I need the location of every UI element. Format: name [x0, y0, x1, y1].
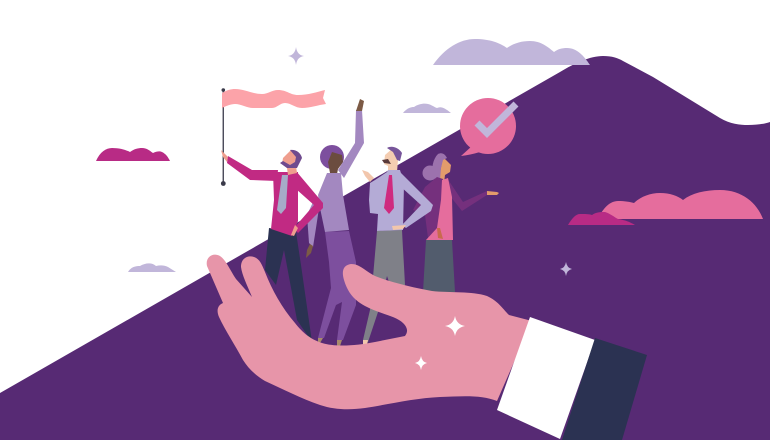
- raised arm: [227, 156, 278, 181]
- sparkle: right: [560, 262, 572, 276]
- head: [439, 157, 451, 183]
- raised arm: [338, 110, 364, 178]
- feet: [318, 338, 342, 346]
- neck and head: [384, 148, 398, 172]
- hand: [487, 191, 499, 195]
- speech bubble with check: [460, 98, 516, 156]
- lowered arm: [307, 202, 319, 247]
- skirt: [423, 240, 455, 292]
- cuff: [497, 317, 595, 439]
- flag pole: [223, 90, 224, 184]
- cloud: left magenta: [96, 148, 170, 161]
- hand: [207, 255, 532, 409]
- torso: [271, 172, 298, 236]
- person 2: [306, 99, 364, 346]
- flag: [221, 88, 326, 186]
- hair and beard: [280, 150, 302, 168]
- sparkle: small on hand: [415, 356, 427, 370]
- foot: [363, 340, 368, 345]
- person 1: [221, 150, 323, 342]
- neck and face: [282, 150, 300, 175]
- hair: [432, 153, 447, 180]
- lowered hand: [306, 244, 313, 258]
- sparkle: top: [288, 47, 304, 65]
- person 4: [413, 153, 499, 292]
- raised hand: [221, 150, 228, 162]
- cloud: right magenta: [568, 212, 635, 225]
- tie: [277, 175, 288, 214]
- hair: [387, 147, 402, 161]
- jacket: [413, 177, 444, 238]
- torso: [318, 173, 349, 232]
- trousers: [318, 231, 356, 340]
- torso and left arm: [369, 170, 404, 231]
- cloud: lower lilac: [128, 263, 176, 272]
- right arm: [398, 170, 433, 228]
- arm on hip: [294, 171, 323, 233]
- right hand: [392, 225, 406, 230]
- moustache: [382, 159, 391, 164]
- arm: [447, 178, 487, 211]
- flag cloth: [222, 89, 326, 108]
- blouse: [426, 178, 453, 240]
- trousers: [363, 230, 405, 342]
- cloud: top lilac: [433, 39, 590, 65]
- cloud: right pink: [598, 190, 763, 219]
- hair: [320, 145, 344, 169]
- raised hand: [356, 99, 364, 111]
- hand in pocket: [437, 228, 443, 239]
- face: [328, 152, 343, 174]
- sleeve: [562, 338, 647, 440]
- tie: [384, 175, 394, 214]
- left hand: [362, 170, 374, 182]
- trousers: [265, 228, 312, 342]
- hair bun: [422, 166, 438, 180]
- hand on hip: [291, 225, 298, 236]
- sparkle: large on hand: [445, 316, 465, 336]
- cloud: small lilac middle: [403, 104, 451, 113]
- person 3: [362, 147, 433, 345]
